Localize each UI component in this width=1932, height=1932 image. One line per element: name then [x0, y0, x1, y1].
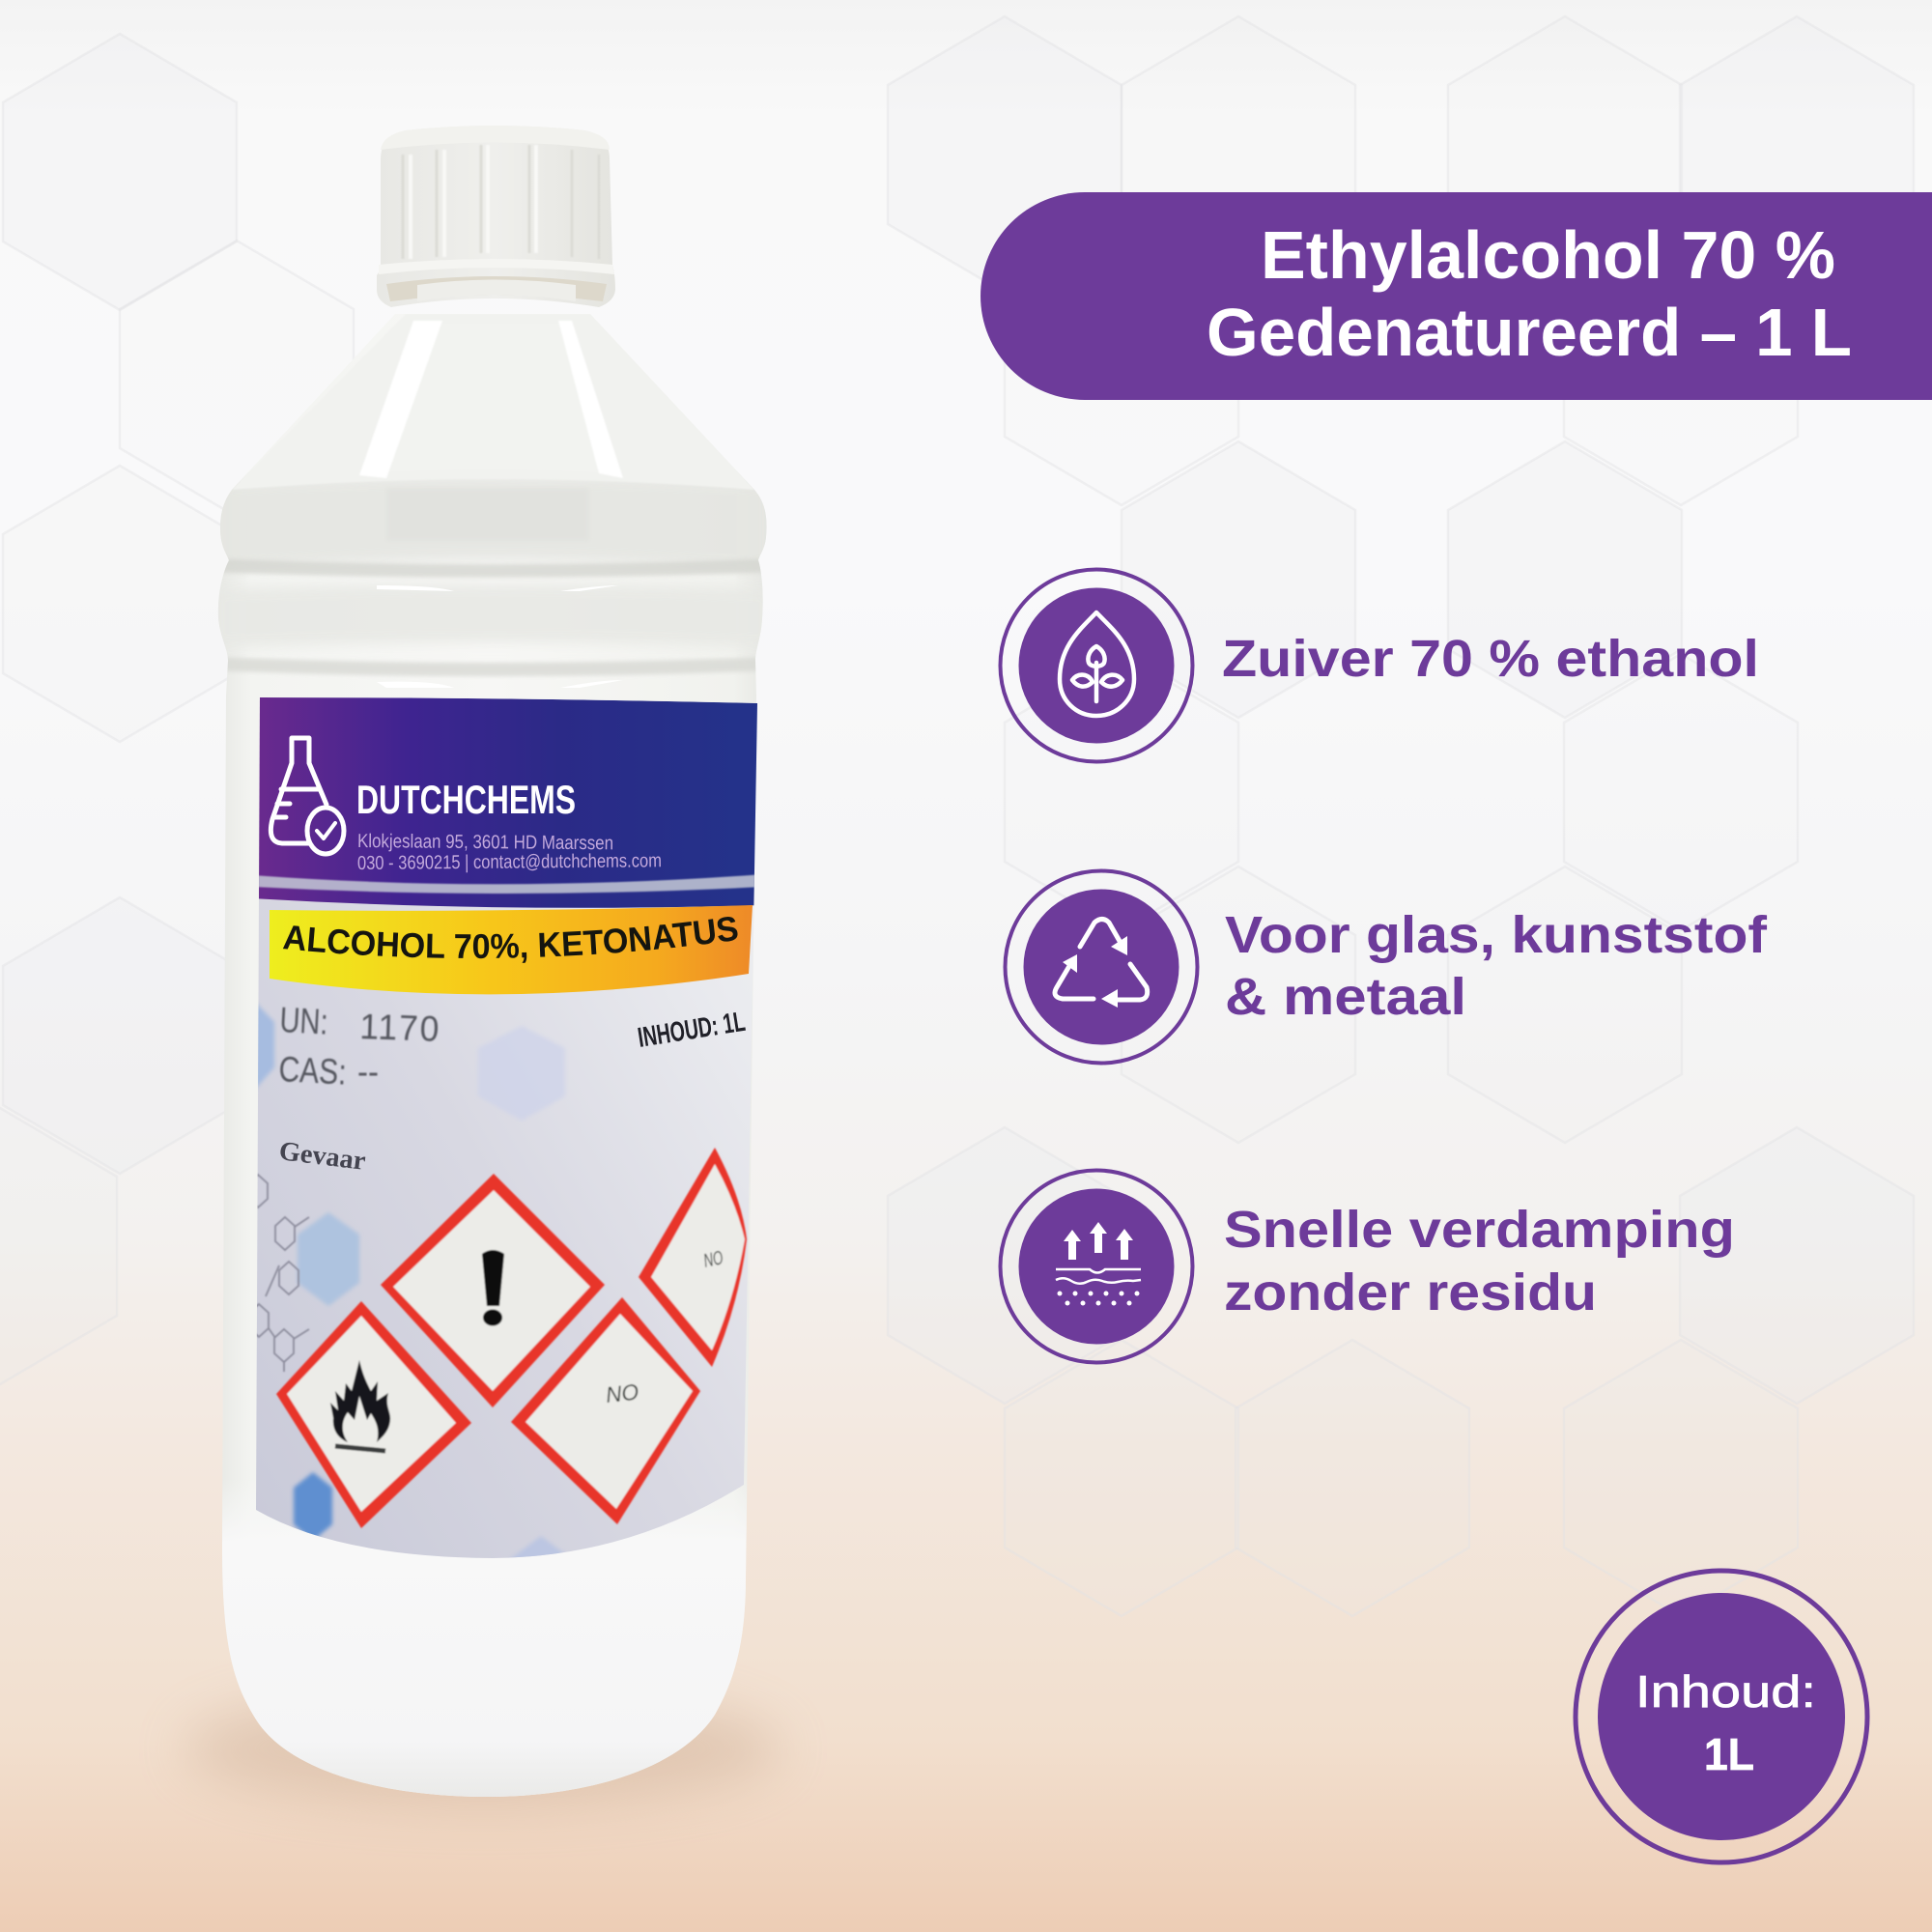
contents on label: INHOUD: 1L [636, 1007, 748, 1054]
product name on label: ALCOHOL 70%, KETONATUS [282, 917, 738, 963]
UN and CAS numbers: 1170 [359, 1007, 441, 1049]
label hexagon decorations [258, 1003, 564, 1557]
title text: Gedenatureerd – 1 L [1207, 295, 1852, 370]
feature: evaporation [1001, 1171, 1735, 1362]
feature text: zonder residu [1224, 1264, 1597, 1321]
icon: drop with plant [1001, 570, 1192, 761]
hazard word: Gevaar [277, 1136, 367, 1177]
bottle shading and highlights [213, 314, 773, 1806]
feature text: & metaal [1225, 968, 1466, 1026]
title banner [980, 192, 1932, 400]
feature text: Snelle verdamping [1224, 1201, 1735, 1259]
UN and CAS numbers: -- [357, 1052, 379, 1092]
brand name: DUTCHCHEMS [356, 777, 576, 822]
bottle cap [377, 126, 615, 307]
address lines [357, 831, 662, 874]
feature: pure ethanol [1001, 570, 1759, 761]
feature text [1224, 1201, 1735, 1321]
bottle [213, 126, 773, 1806]
badge text: Inhoud: [1635, 1666, 1816, 1717]
hazard diamond: flame [276, 1301, 471, 1528]
hazard diamond: NO partially wrapped: NO [701, 1247, 725, 1272]
hazard diamond: NO [511, 1297, 700, 1524]
UN and CAS numbers [278, 1000, 441, 1093]
label molecule lines [257, 1173, 310, 1372]
label header band [253, 697, 763, 908]
UN and CAS numbers: UN: [279, 1000, 329, 1042]
badge text: 1L [1704, 1729, 1754, 1779]
icon: recycling triangle [1005, 871, 1198, 1063]
icon: evaporation arrows [1001, 1171, 1192, 1362]
hazard diamond: exclamation [381, 1174, 605, 1407]
address lines: Klokjeslaan 95, 3601 HD Maarssen [357, 831, 613, 854]
address lines: 030 - 3690215 | contact@dutchchems.com [357, 850, 662, 874]
ground shadow of bottle [184, 1690, 782, 1806]
feature text: Zuiver 70 % ethanol [1222, 630, 1759, 688]
label background [232, 696, 763, 1565]
feature text: Voor glas, kunststof [1225, 906, 1768, 964]
yellow product band [270, 905, 753, 994]
volume badge [1576, 1571, 1867, 1862]
title text: Ethylalcohol 70 % [1261, 217, 1835, 293]
bottle body [218, 314, 767, 1797]
hazard diamond: NO: NO [605, 1379, 639, 1407]
hazard diamond: NO partially wrapped [639, 1148, 747, 1367]
feature text [1225, 906, 1768, 1026]
feature: surfaces [1005, 871, 1768, 1063]
logo flask icon [270, 738, 344, 854]
badge text [1635, 1666, 1816, 1779]
title text [1207, 217, 1852, 370]
UN and CAS numbers: CAS: [278, 1049, 348, 1093]
product label on bottle [256, 697, 757, 1558]
